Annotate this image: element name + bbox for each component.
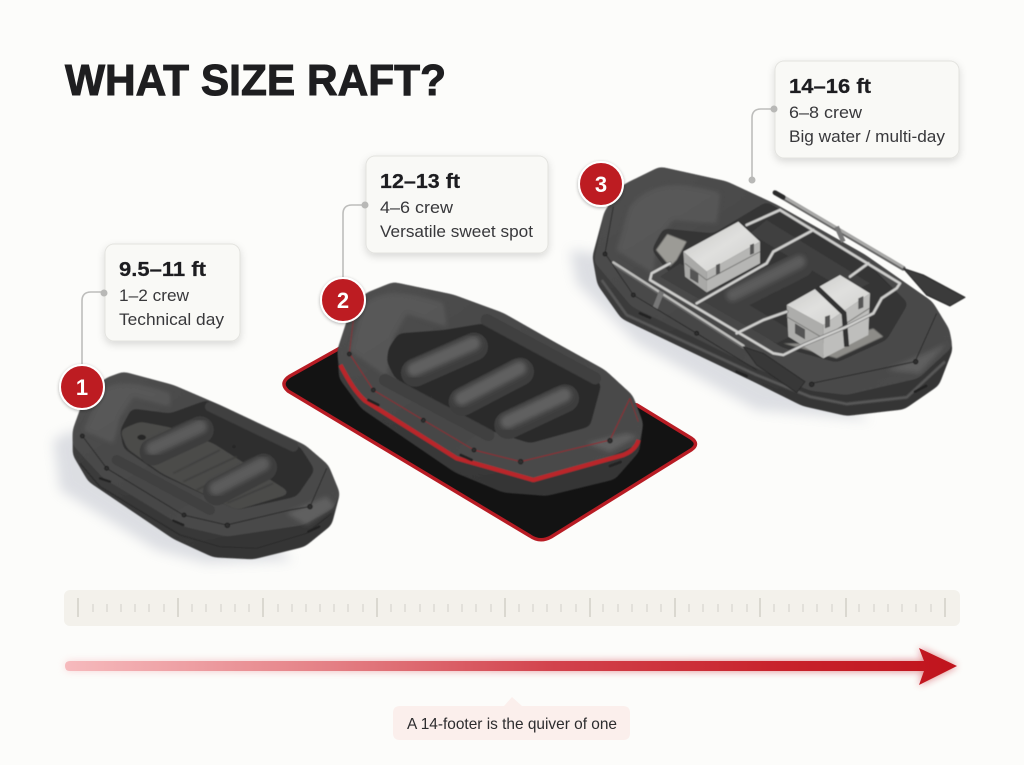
badge 3 (579, 162, 623, 206)
rowing frame (650, 210, 900, 355)
callout 1: Technical day (119, 310, 224, 329)
note pill: A 14-footer is the quiver of one (407, 716, 617, 733)
size arrow (65, 648, 957, 685)
callout 2: 12–13 ft (380, 170, 460, 193)
leader line 3 (752, 109, 774, 180)
callout 1 (100, 244, 240, 341)
callout 3: 14–16 ft (789, 75, 871, 98)
badge 1 (60, 365, 104, 409)
raft 2: medium raft with red trim (337, 282, 643, 496)
raft 2 mat (284, 348, 696, 540)
thwart 1 (414, 343, 474, 373)
callout 1: 9.5–11 ft (119, 258, 206, 281)
note pill (393, 697, 630, 740)
thwart 1 (153, 427, 200, 452)
thwart 3 (507, 395, 565, 425)
badge 3: 3 (595, 172, 607, 197)
badge 1: 1 (76, 375, 88, 400)
cooler 1 (683, 222, 760, 292)
raft 1: small raft (53, 372, 340, 563)
callout 2: 4–6 crew (380, 198, 454, 217)
cooler 2 (787, 275, 870, 358)
badge 2: 2 (337, 288, 349, 313)
callout 1: 1–2 crew (119, 286, 190, 305)
callout 3: Big water / multi-day (789, 127, 946, 146)
leader line 1 (82, 292, 103, 366)
oar: near side (613, 262, 805, 393)
thwart 2 (462, 368, 520, 402)
oar: far side (775, 193, 965, 306)
raft 3: large gear raft (570, 167, 965, 420)
callout 3: 6–8 crew (789, 103, 863, 122)
thwart 2 (216, 464, 263, 492)
thwart (733, 262, 800, 298)
callout 3 (748, 61, 959, 184)
callout 2 (362, 156, 548, 253)
title: WHAT SIZE RAFT? (65, 56, 446, 105)
badge 2 (321, 278, 365, 322)
leader line 2 (343, 205, 365, 278)
ruler (64, 590, 960, 626)
callout 2: Versatile sweet spot (380, 222, 533, 241)
